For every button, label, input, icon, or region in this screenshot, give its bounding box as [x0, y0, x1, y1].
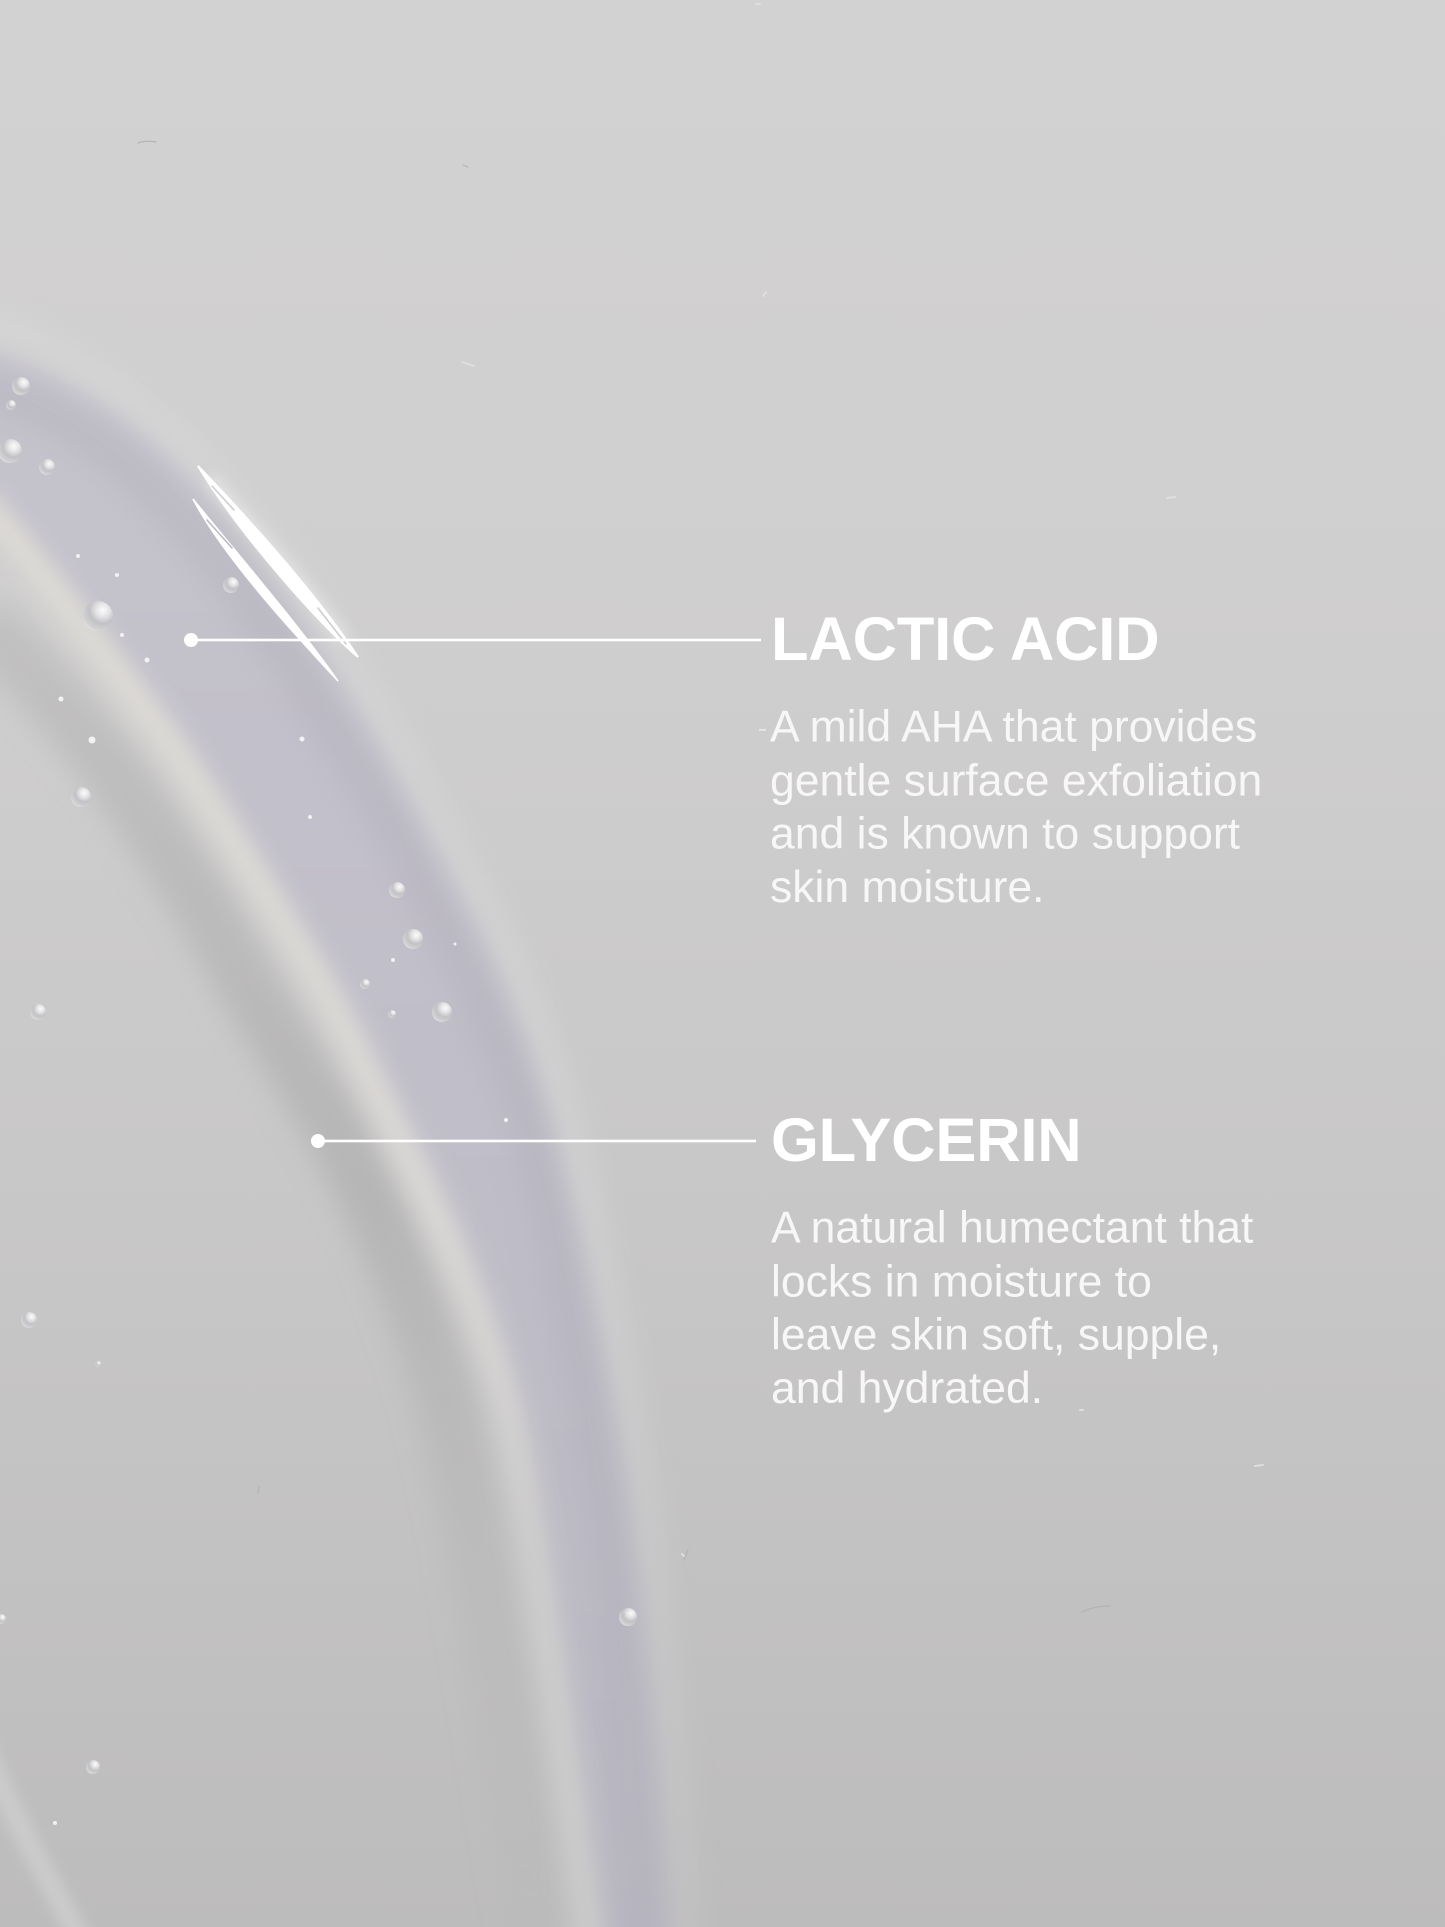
- leader line with dot: lactic acid: [184, 633, 761, 647]
- gel: lavender body: [0, 340, 672, 1927]
- callout: lactic acid: [184, 605, 1275, 912]
- gel: darker band inside rim: [0, 385, 645, 1927]
- surface specks: [138, 4, 1263, 1612]
- description: glycerin: A natural humectant that: [771, 1204, 1254, 1252]
- gel: light outer rim: [0, 322, 688, 1927]
- callout: glycerin: [311, 1106, 1266, 1413]
- heading: glycerin: GLYCERIN: [771, 1106, 1082, 1175]
- tick mark beside description: [759, 729, 766, 731]
- highlight: glow: [210, 478, 345, 640]
- description: glycerin: leave skin soft, supple,: [771, 1310, 1221, 1360]
- highlight: lower streak: [193, 499, 338, 681]
- description: glycerin: locks in moisture to: [771, 1258, 1152, 1306]
- description: lactic acid: A mild AHA that provides: [770, 702, 1257, 752]
- air bubbles: [0, 377, 637, 1825]
- gel: dark trough beside inner ridge: [0, 620, 540, 1927]
- highlight: upper streak hollow and grain: [212, 486, 346, 644]
- gel swatch: [0, 322, 688, 1927]
- highlight: upper streak: [198, 466, 358, 657]
- highlight: lower streak hollow: [207, 520, 232, 548]
- heading: lactic acid: LACTIC ACID: [771, 605, 1159, 674]
- specular highlights on gel: [193, 466, 358, 681]
- description: lactic acid: and is known to support: [770, 810, 1241, 858]
- description: lactic acid: gentle surface exfoliation: [770, 756, 1262, 806]
- gel: secondary streak lower left: [0, 1740, 86, 1927]
- description: glycerin: and hydrated.: [771, 1364, 1043, 1413]
- description: lactic acid: skin moisture.: [770, 863, 1044, 912]
- gel: bright inner ridge: [0, 500, 592, 1927]
- leader line with dot: glycerin: [311, 1134, 756, 1148]
